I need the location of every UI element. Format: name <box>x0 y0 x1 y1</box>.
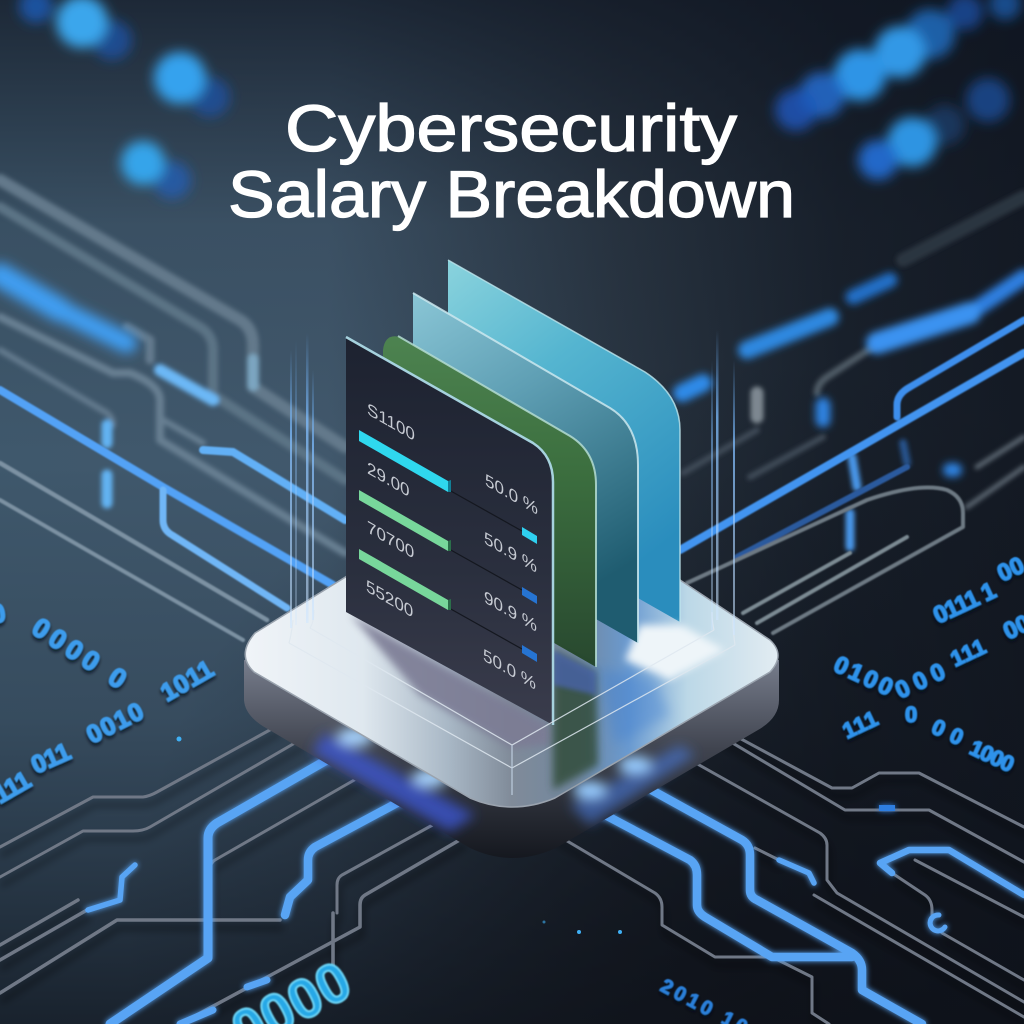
glass outline on platform <box>289 610 735 795</box>
value labels <box>366 398 415 622</box>
green and teal reflections on platform <box>553 650 670 790</box>
blurred blue trace: left <box>0 275 127 343</box>
row line 1 <box>449 490 522 649</box>
binary digits: left <box>0 597 219 809</box>
circuit traces: right midground <box>680 320 1024 633</box>
port glow <box>312 728 695 832</box>
bar 3 green <box>359 549 451 610</box>
platform reflections <box>350 614 550 748</box>
marker 1 cyan <box>522 527 537 544</box>
percentage labels <box>483 469 538 694</box>
circuit traces: left midground <box>0 390 345 640</box>
value labels: 70700 <box>367 516 414 563</box>
platform top surface <box>245 500 778 807</box>
binary digits: right <box>829 552 1024 777</box>
binary digits: right: 111 <box>839 706 882 744</box>
title <box>228 91 795 231</box>
binary digits: right: 0100 <box>829 651 897 702</box>
platform base <box>244 500 779 858</box>
percentage labels: 90.9 % <box>484 586 537 636</box>
binary digits: right: 1000 <box>966 735 1018 777</box>
binary digits: right: 000 <box>891 658 950 704</box>
white glare under rear panels <box>625 625 725 680</box>
light sheets: right <box>711 330 735 635</box>
panel card: blue (back) <box>448 260 680 622</box>
value labels: S1100 <box>367 398 415 445</box>
marker 3 blue <box>522 645 537 662</box>
circuit traces: right background (blurred) <box>683 197 1024 547</box>
bokeh lights: top right <box>775 0 1021 180</box>
title line 1: Cybersecurity <box>285 91 737 165</box>
percentage labels: 50.0 % <box>485 469 538 519</box>
bar 1 cyan <box>359 430 451 492</box>
binary digits: right: 0111 1 <box>929 577 1000 629</box>
small glow dots <box>176 736 622 934</box>
binary digits: right: 0 <box>905 702 917 727</box>
value labels: 55200 <box>366 575 413 622</box>
binary digits: left: 0010 <box>82 697 148 749</box>
binary digits: right: 111 <box>947 634 990 672</box>
title line 2: Salary Breakdown <box>228 157 795 231</box>
marker 2 blue <box>522 587 537 604</box>
circuit traces: left background (blurred) <box>0 180 345 553</box>
percentage labels: 50.9 % <box>484 527 537 577</box>
platform side <box>244 660 779 858</box>
bokeh lights: top left <box>19 0 230 199</box>
blurred blue traces: right <box>682 277 1024 470</box>
value labels: 29.00 <box>367 457 410 501</box>
binary digits: left: 1011 <box>156 655 219 707</box>
percentage labels: 50.0 % <box>483 644 536 694</box>
light sheets: left <box>290 333 314 628</box>
circuit traces: bottom blue <box>88 749 1024 1024</box>
panel card: front salary data <box>346 337 553 725</box>
binary digits: left: 011 <box>27 738 75 779</box>
panel card: teal <box>413 293 638 643</box>
panel card: green <box>383 336 596 667</box>
bar 2 green <box>359 490 451 551</box>
circuit traces: bottom grey <box>0 723 1024 1024</box>
binary digits: left: 0000 0 <box>27 612 132 695</box>
binary digits: right: 00 <box>928 714 967 750</box>
